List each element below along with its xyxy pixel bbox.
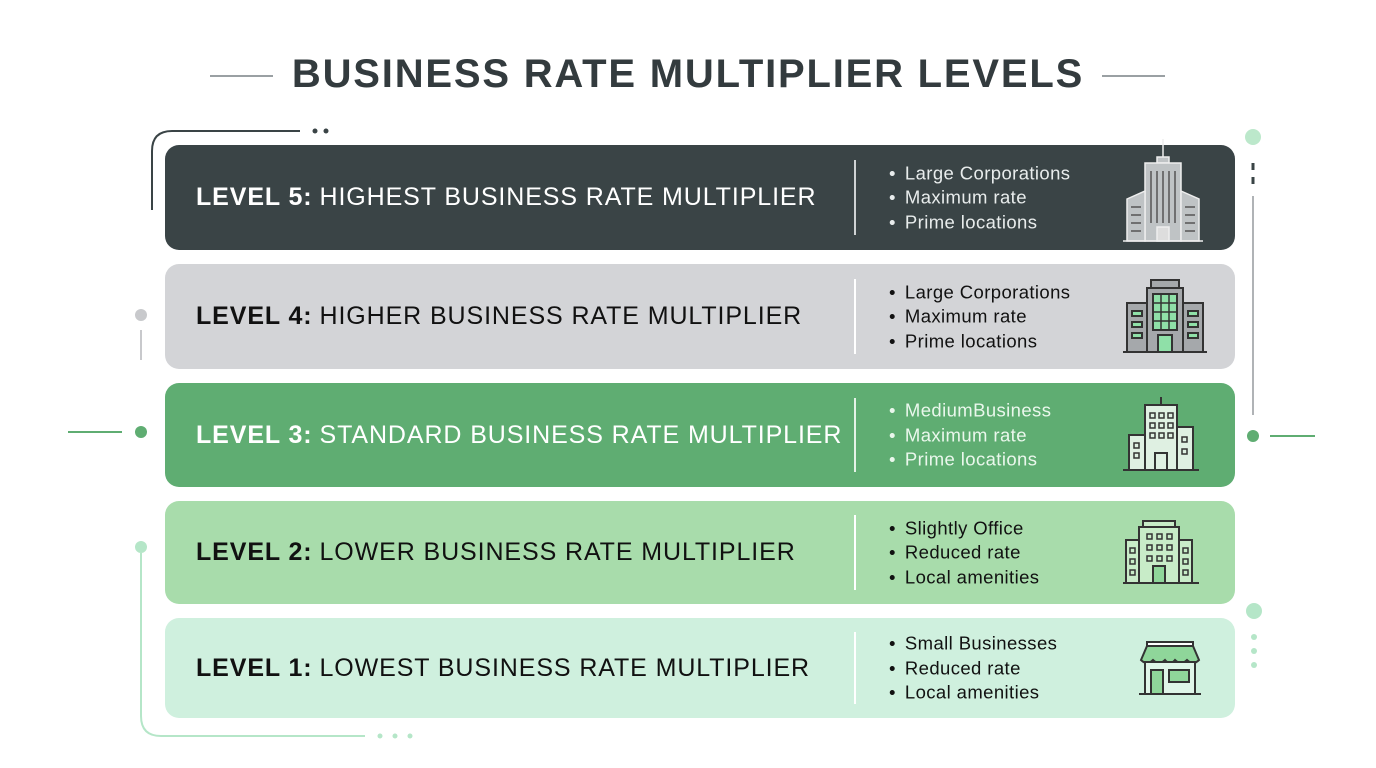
- heading: level 2: LEVEL 2:: [196, 538, 312, 566]
- bullets: level 1: Reduced rate: [905, 657, 1021, 678]
- bullets: level 3: [890, 399, 1051, 469]
- title: BUSINESS RATE MULTIPLIER LEVELS: [292, 52, 1084, 96]
- bullets: level 4: Prime locations: [905, 330, 1037, 351]
- heading: level 1: LOWEST BUSINESS RATE MULTIPLIER: [320, 654, 810, 682]
- bullets: level 4: [890, 281, 1070, 351]
- panel: level 2: [165, 501, 1235, 604]
- panel: level 1: [165, 618, 1235, 718]
- heading: level 3: LEVEL 3:: [196, 420, 312, 448]
- panel: level 4: [165, 264, 1235, 369]
- heading: level 5: HIGHEST BUSINESS RATE MULTIPLIER: [320, 183, 816, 211]
- bullets: level 5: Prime locations: [905, 211, 1037, 232]
- icon: skyscraper: [1123, 139, 1203, 242]
- bullets: level 1: Local amenities: [905, 681, 1039, 702]
- bullets: level 3: Prime locations: [905, 448, 1037, 469]
- heading: level 1: LEVEL 1:: [196, 654, 312, 682]
- heading: level 5: LEVEL 5:: [196, 183, 312, 211]
- bullets: level 1: [890, 632, 1057, 702]
- bullets: level 4: Large Corporations: [905, 281, 1070, 302]
- icon: building: [1123, 520, 1199, 584]
- heading: level 3: STANDARD BUSINESS RATE MULTIPLIER: [320, 420, 842, 448]
- bullets: level 2: [890, 517, 1039, 587]
- panel: level 5: [165, 145, 1235, 250]
- icon: mid building: [1123, 397, 1199, 471]
- icon: office building: [1123, 279, 1207, 353]
- icon: shop: [1139, 641, 1201, 695]
- bullets: level 1: Small Businesses: [905, 632, 1057, 653]
- bullets: level 3: Maximum rate: [905, 424, 1027, 445]
- heading: level 4: LEVEL 4:: [196, 302, 312, 330]
- bullets: level 2: Slightly Office: [905, 517, 1024, 538]
- bullets: level 2: Reduced rate: [905, 541, 1021, 562]
- bullets: level 2: Local amenities: [905, 566, 1039, 587]
- heading: level 2: LOWER BUSINESS RATE MULTIPLIER: [320, 538, 796, 566]
- bullets: level 5: Maximum rate: [905, 186, 1027, 207]
- heading: level 4: HIGHER BUSINESS RATE MULTIPLIER: [320, 302, 802, 330]
- bullets: level 4: Maximum rate: [905, 305, 1027, 326]
- panel: level 3: [165, 383, 1235, 487]
- bullets: level 3: MediumBusiness: [905, 399, 1051, 420]
- bullets: level 5: [890, 162, 1070, 232]
- bullets: level 5: Large Corporations: [905, 162, 1070, 183]
